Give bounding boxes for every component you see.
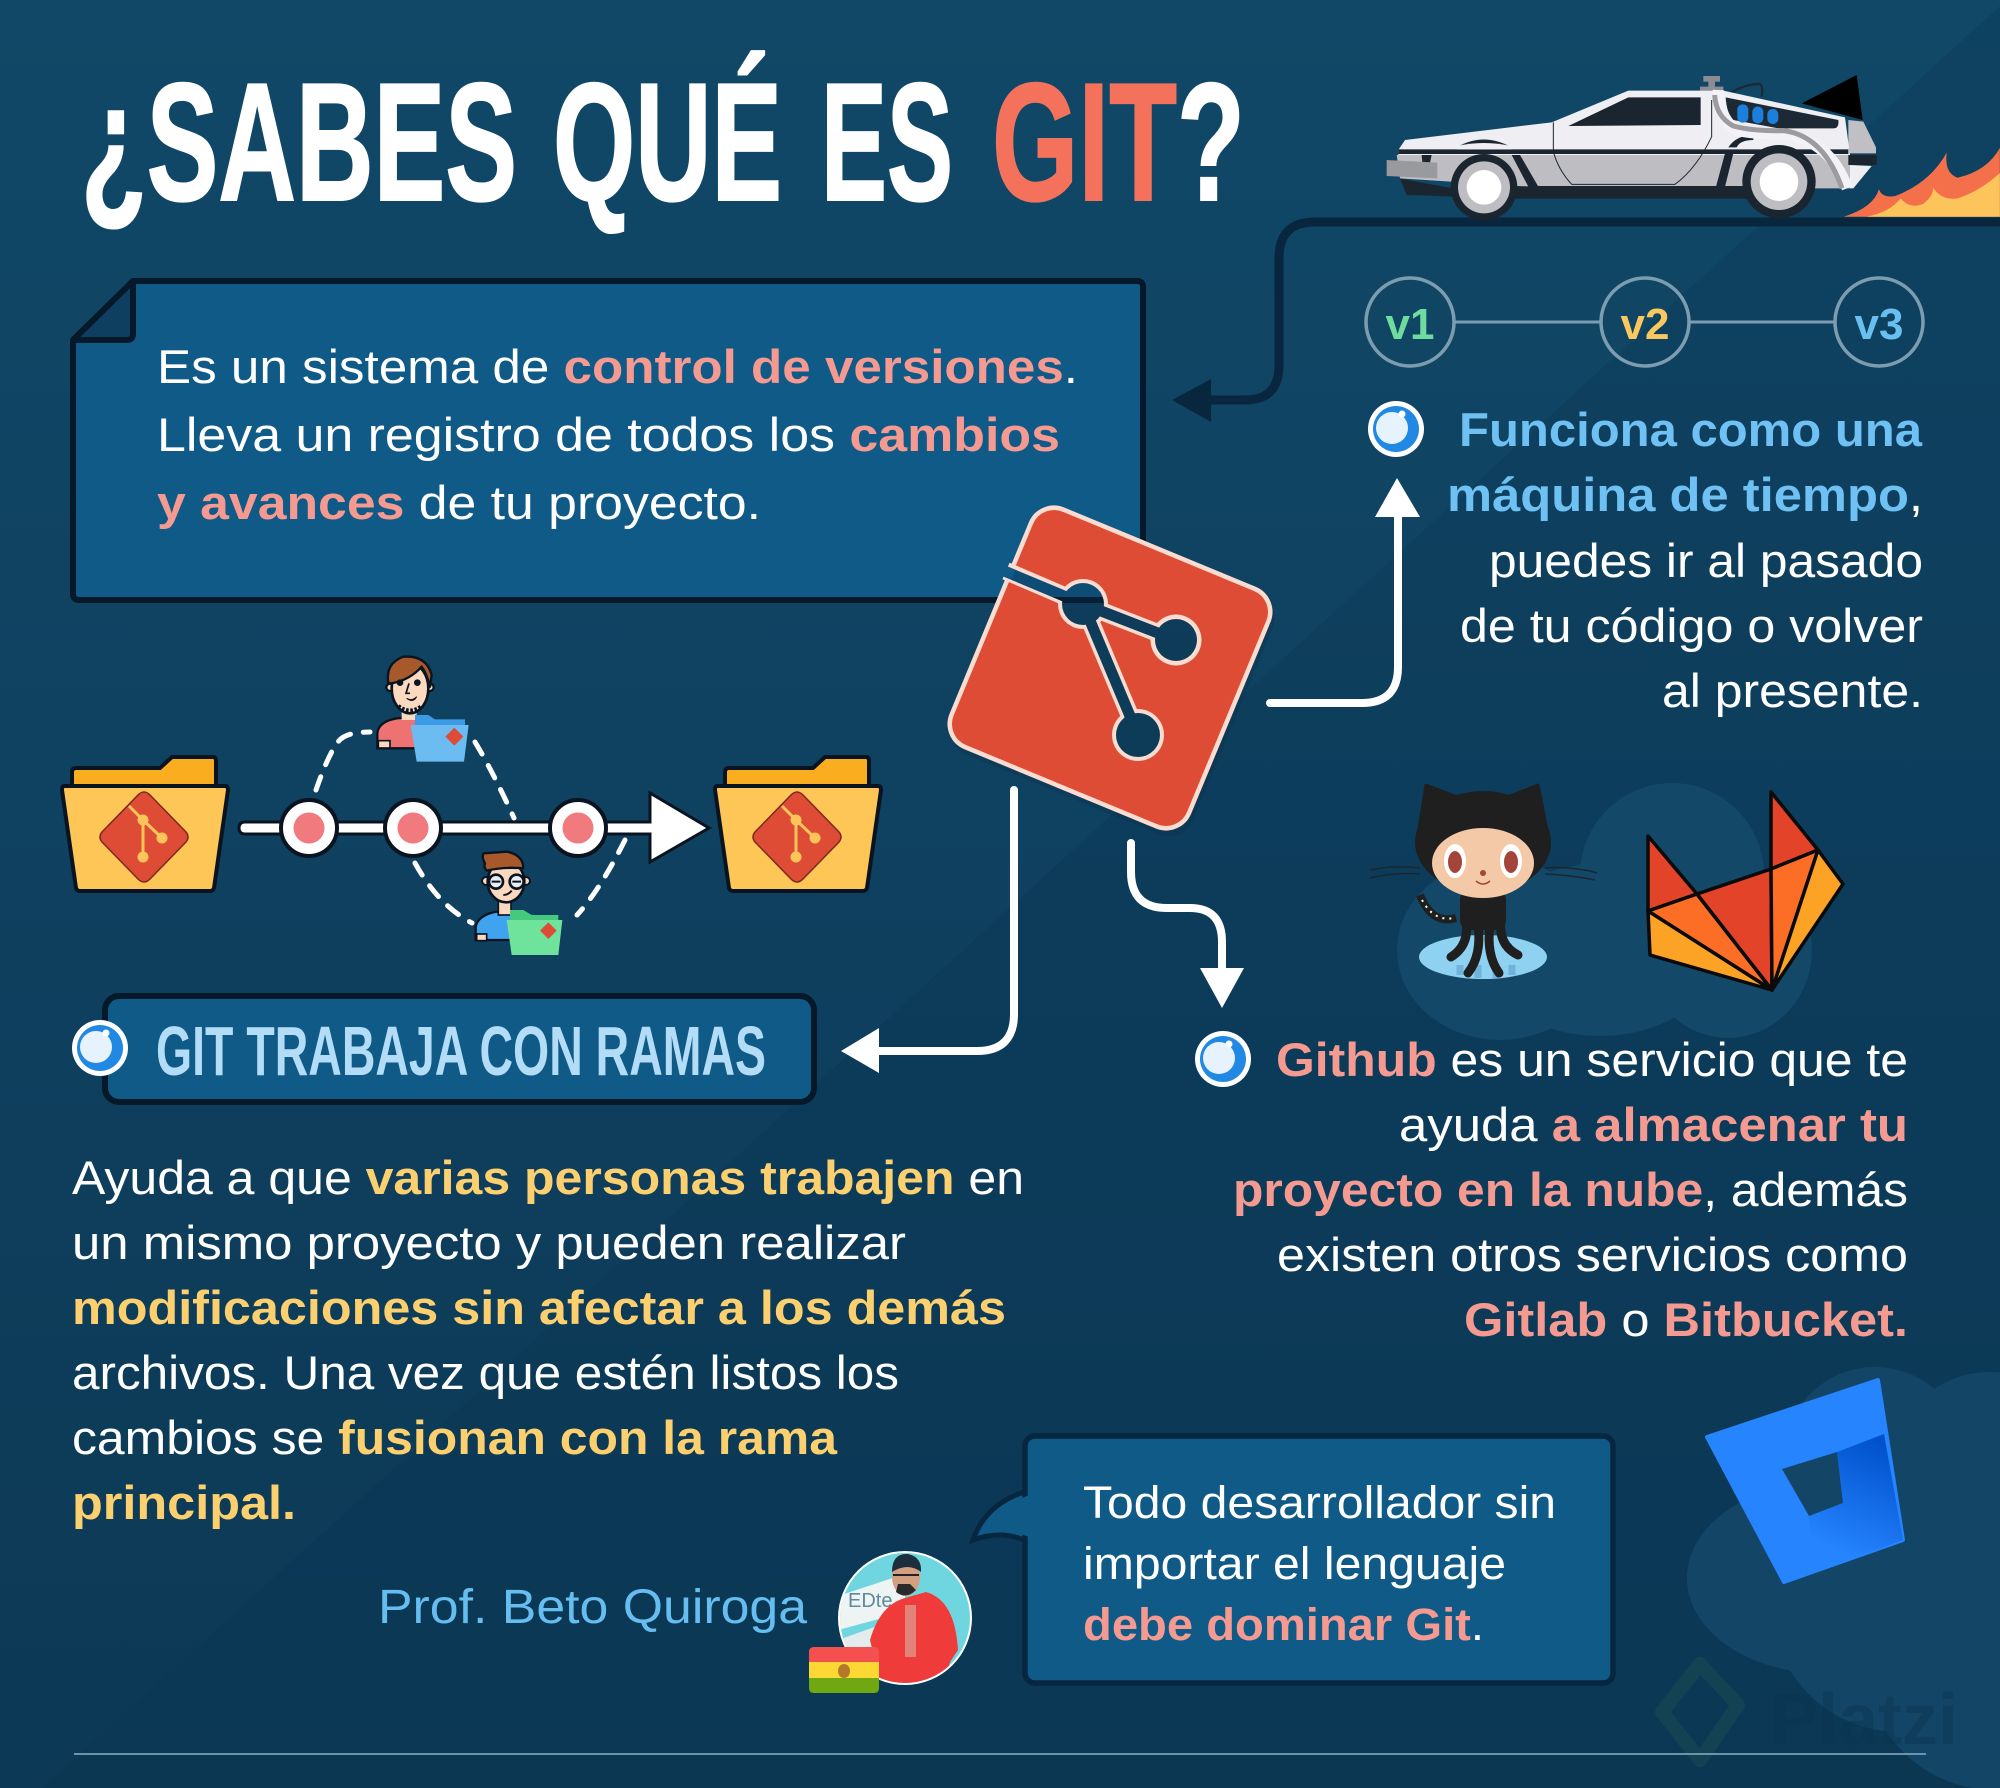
panel: speech bubble: debe dominar Git .	[1083, 1599, 1484, 1650]
text: branches description: un mismo proyecto y pueden realizar	[72, 1216, 906, 1269]
text: branches description: cambios se fusionan con la rama	[72, 1411, 838, 1464]
version timeline v1 v2 v3: v3	[1855, 300, 1903, 349]
panel: definition box	[73, 281, 1143, 600]
panel: speech bubble: importar el lenguaje	[1083, 1538, 1506, 1589]
text: github description: proyecto en la nube , además	[1233, 1163, 1908, 1216]
title: GIT	[992, 48, 1177, 236]
icon: source folder	[62, 757, 228, 891]
text: branches description: archivos. Una vez que estén listos los	[72, 1346, 899, 1399]
divider	[74, 1753, 1926, 1755]
icon: developer bottom with green folder	[476, 852, 562, 955]
text: github description	[1233, 1033, 1908, 1346]
text: branches description	[72, 1151, 1024, 1529]
text: github description: ayuda a almacenar tu	[1399, 1098, 1908, 1151]
text: time machine: Funciona como una	[1459, 403, 1923, 456]
icon: git logo	[942, 500, 1283, 844]
arrow: to github text	[1131, 843, 1244, 1008]
arrow: to time machine	[1270, 478, 1420, 703]
panel: speech bubble: Todo desarrollador sin	[1083, 1477, 1556, 1528]
version timeline v1 v2 v3: v2	[1621, 300, 1669, 349]
version timeline v1 v2 v3: v1	[1386, 300, 1434, 349]
cloud behind github and gitlab	[1397, 783, 1812, 1040]
text: time machine: de tu código o volver	[1460, 599, 1923, 652]
icon: developer top with blue folder	[377, 657, 469, 762]
panel: branches heading	[105, 996, 814, 1102]
panel: branches heading: GIT TRABAJA CON RAMAS	[156, 1012, 766, 1090]
text: branches description: modificaciones sin afectar a los demás	[72, 1281, 1006, 1334]
title: ¿SABES	[81, 48, 517, 236]
title	[81, 48, 1245, 236]
dashed branch paths	[316, 732, 625, 923]
text: branches description: Ayuda a que varias personas trabajen en	[72, 1151, 1024, 1204]
icon: gitlab	[1648, 792, 1843, 990]
platzi watermark: Platzi	[1770, 1680, 1958, 1760]
author name: Prof. Beto Quiroga	[378, 1581, 807, 1634]
panel: definition box: Lleva un registro de todos los cambios	[157, 408, 1060, 461]
cloud bottom right	[1687, 1367, 2000, 1788]
icon: octocat	[1370, 785, 1597, 979]
icon: bullet github	[1195, 1031, 1251, 1087]
text: time machine: al presente.	[1662, 664, 1923, 717]
platzi watermark	[1662, 1664, 1958, 1760]
icon: bolivia flag	[809, 1647, 879, 1693]
title: ?	[1177, 48, 1245, 236]
commit nodes	[281, 800, 606, 856]
icon: bullet branches	[72, 1020, 128, 1076]
icon: delorean car	[1387, 75, 1877, 221]
arrow: to branches heading	[841, 790, 1014, 1073]
text: time machine: puedes ir al pasado	[1489, 534, 1923, 587]
panel: definition box: Es un sistema de control de versiones .	[157, 340, 1078, 393]
title: ES	[821, 48, 953, 236]
title: QUÉ	[553, 48, 782, 236]
panel: definition box: y avances de tu proyecto.	[157, 476, 761, 529]
author photo	[838, 1550, 972, 1690]
text: github description: existen otros servicios como	[1277, 1228, 1908, 1281]
arrow: dark connector from car road to definition box	[1172, 222, 2000, 422]
text: github description: Gitlab o Bitbucket.	[1464, 1293, 1908, 1346]
text: branches description: principal.	[72, 1476, 296, 1529]
panel: speech bubble	[973, 1436, 1613, 1683]
icon: flames	[1844, 148, 2000, 217]
icon: bullet time machine	[1368, 401, 1424, 457]
version timeline v1 v2 v3	[1366, 278, 1923, 366]
main branch arrow	[239, 793, 709, 862]
icon: bitbucket logo	[1707, 1380, 1903, 1582]
text: time machine	[1447, 403, 1923, 717]
icon: merged folder	[715, 757, 881, 891]
text: github description: Github es un servicio que te	[1276, 1033, 1908, 1086]
text: time machine: máquina de tiempo ,	[1447, 468, 1923, 521]
diagram: git branches	[62, 657, 881, 955]
author photo: EDte	[848, 1590, 892, 1612]
